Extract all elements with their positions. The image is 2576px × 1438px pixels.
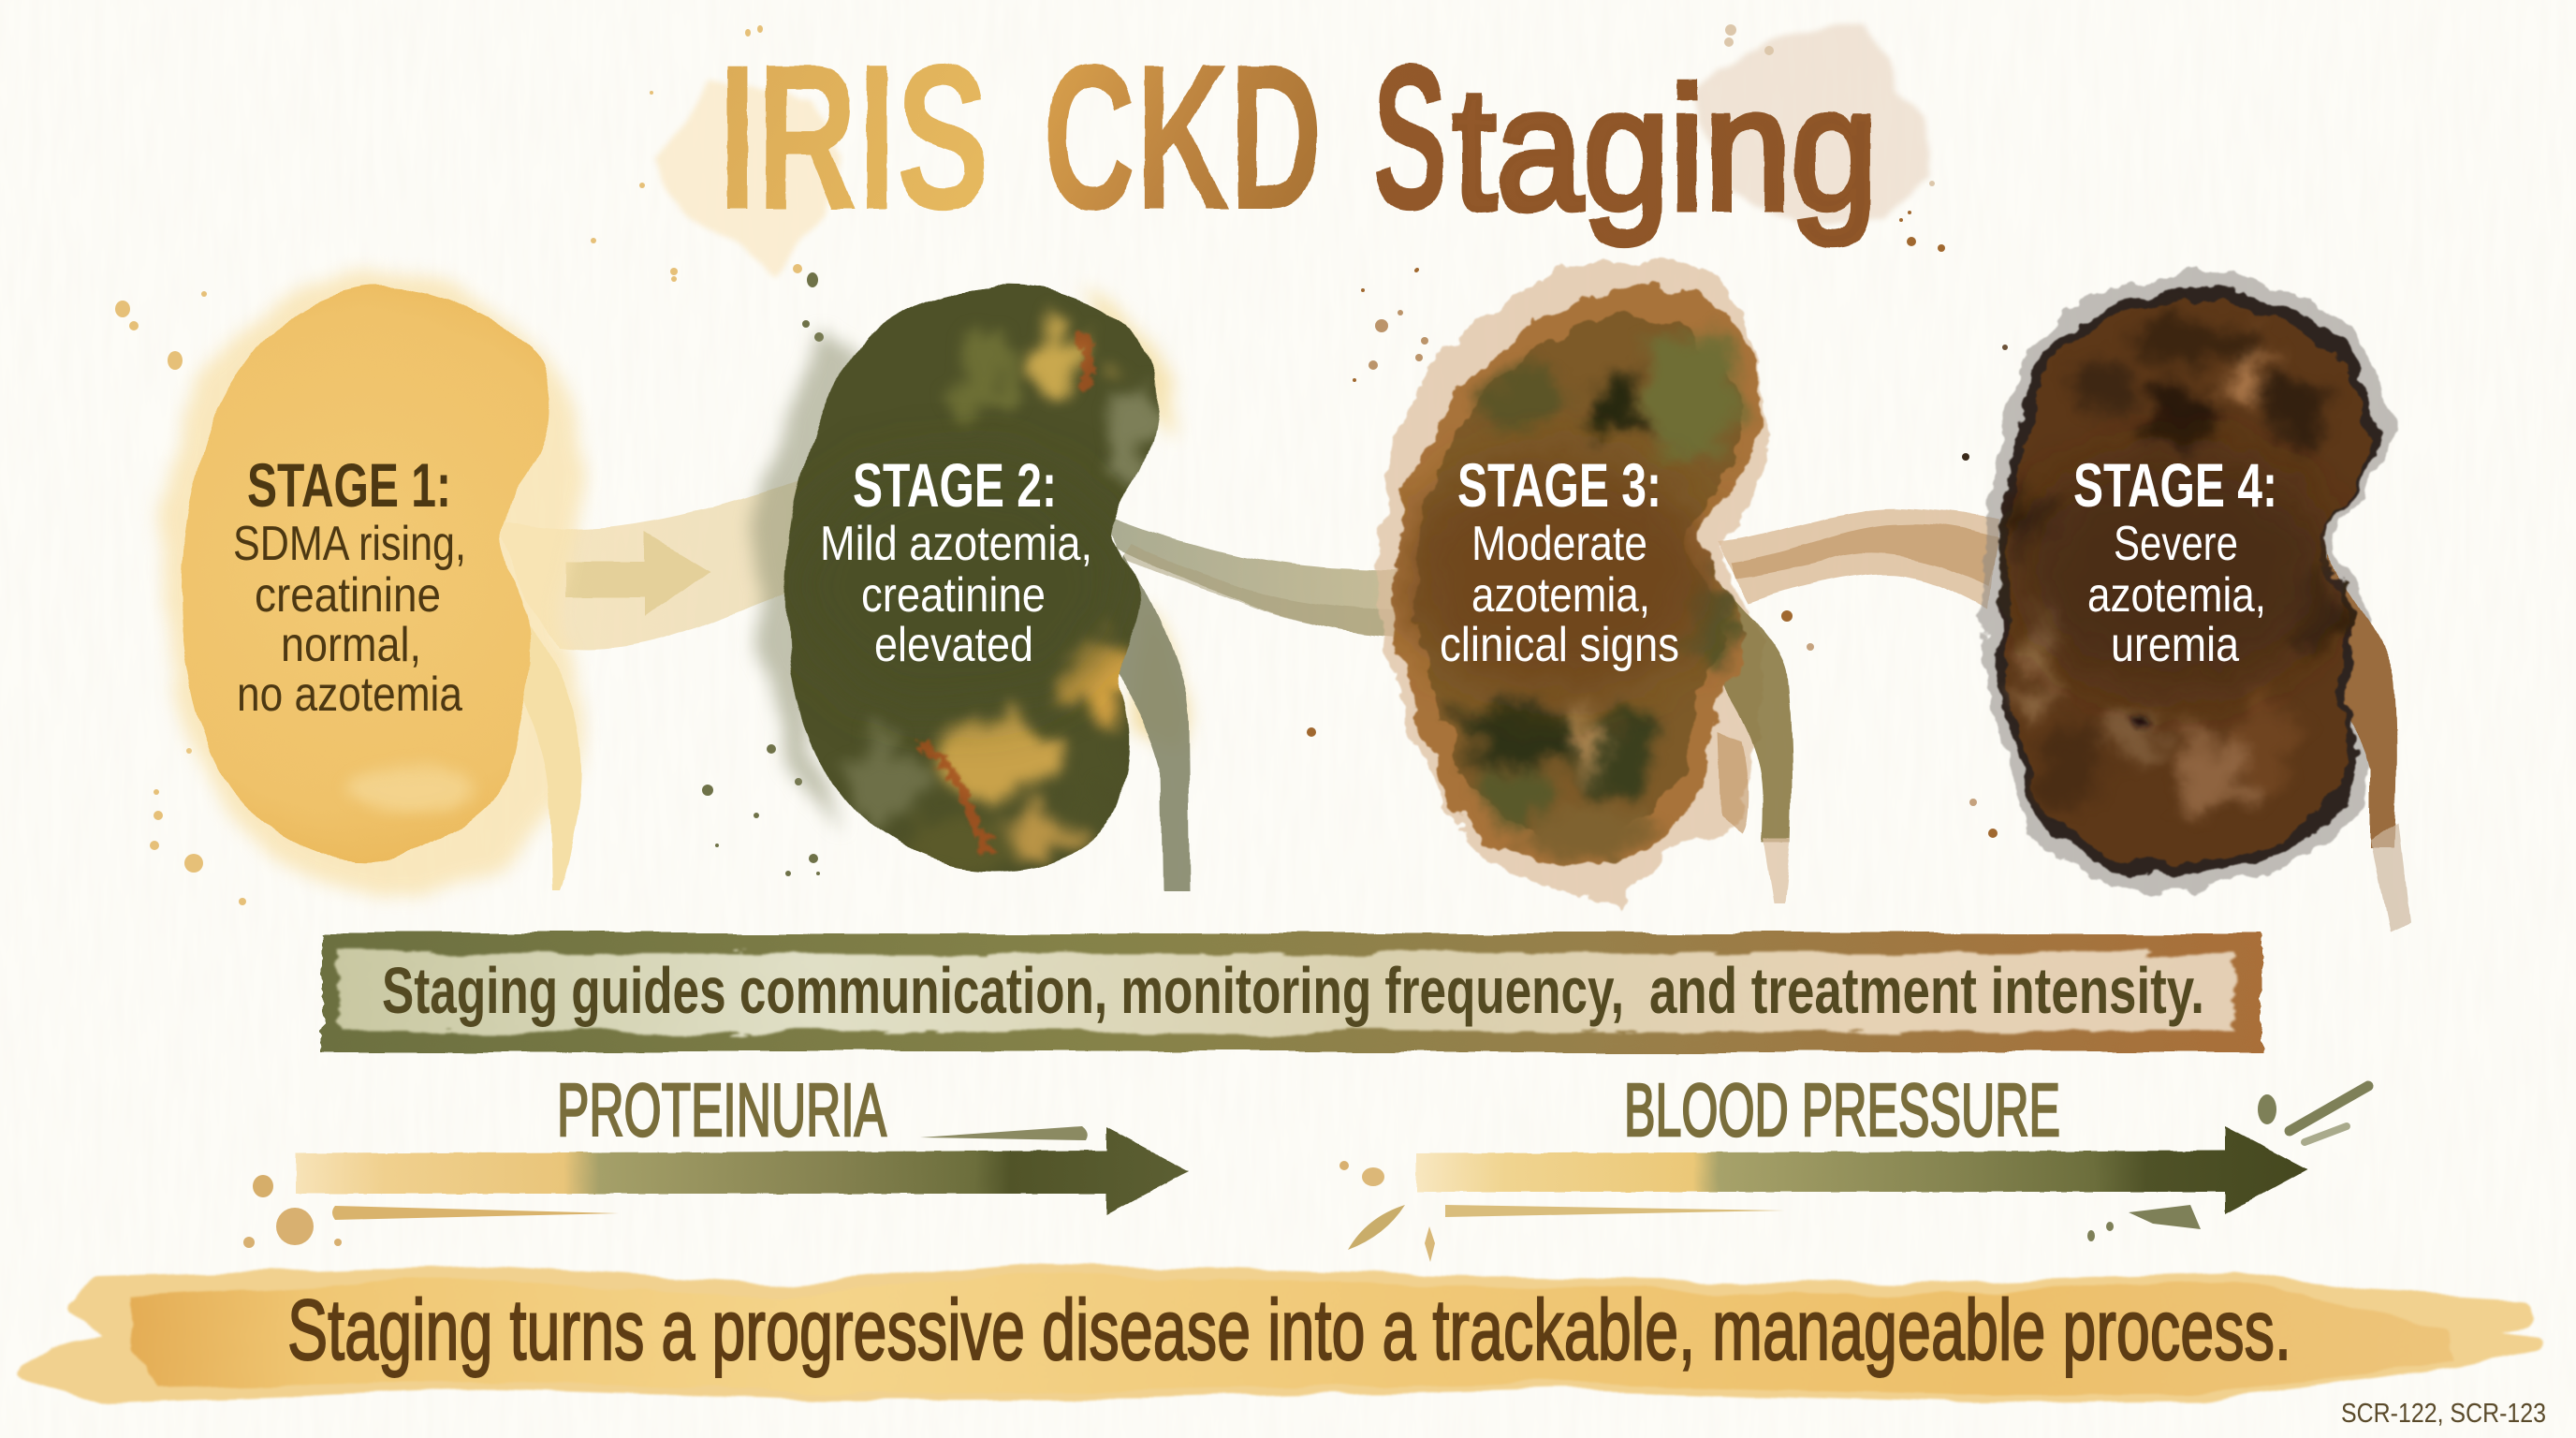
ureter	[501, 599, 580, 889]
accent strokes and drops	[1339, 1086, 2368, 1262]
band frame	[322, 933, 2261, 1052]
band text: Staging guides communication, monitoring frequency,	[382, 954, 1624, 1027]
icon: watercolor arrow	[566, 532, 710, 618]
ureter	[1114, 553, 1191, 889]
stage 1 text: normal,	[281, 618, 421, 672]
stage 3 text: clinical signs	[1440, 618, 1679, 672]
stage 4 text: STAGE 4:	[2073, 450, 2277, 520]
stage 2 text	[820, 450, 1092, 672]
kidney body	[1392, 286, 1761, 865]
panel: stage 4 kidney	[1983, 272, 2409, 932]
wash halo	[1983, 272, 2392, 892]
stage 1 text: SDMA rising,	[233, 517, 466, 571]
stage 3 text: Moderate	[1471, 517, 1647, 571]
stage 3 text: azotemia,	[1471, 568, 1650, 623]
title: taging	[1453, 52, 1878, 246]
connector: stage 1 to stage 2 with arrow	[494, 473, 824, 650]
title: CKD	[1043, 22, 1323, 254]
stage 2 text: Mild azotemia,	[820, 517, 1092, 571]
proteinuria label: PROTEINURIA	[557, 1068, 886, 1152]
panel: stage 3 kidney	[1378, 260, 1792, 908]
source note: SCR-122, SCR-123	[2341, 1399, 2546, 1429]
banner wash	[28, 1272, 2535, 1395]
ureter	[1718, 580, 1792, 903]
stage 3 text: STAGE 3:	[1457, 450, 1661, 520]
connector: stage 3 to stage 4	[1718, 508, 1998, 609]
kidney body	[1996, 288, 2377, 876]
title: S	[1372, 22, 1448, 254]
title: IRIS	[718, 22, 989, 254]
stage 4 text: uremia	[2111, 618, 2239, 672]
stage 3 text	[1440, 450, 1679, 672]
stage 4 text: Severe	[2114, 517, 2238, 571]
kidney body	[181, 286, 550, 861]
stage 4 text: azotemia,	[2087, 568, 2266, 623]
stage 2 text: elevated	[874, 618, 1033, 672]
stage 2 text: STAGE 2:	[853, 450, 1057, 520]
stage 1 text: STAGE 1:	[247, 450, 451, 520]
stage 2 text: creatinine	[861, 568, 1046, 623]
title	[718, 22, 1878, 254]
accent strokes and drops	[243, 1126, 1088, 1248]
stage 1 text	[233, 450, 466, 722]
proteinuria arrow	[296, 1127, 1189, 1215]
panel: takeaway banner	[28, 1272, 2535, 1395]
blood pressure label: BLOOD PRESSURE	[1624, 1068, 2060, 1152]
wash halo	[754, 290, 1184, 833]
blood pressure arrow	[1416, 1126, 2307, 1214]
panel: stage 2 kidney	[754, 286, 1191, 889]
splatter dots	[115, 24, 2008, 905]
wash halo	[162, 271, 584, 890]
ureter	[2327, 553, 2409, 932]
panel: stage 1 kidney	[162, 271, 584, 890]
connector: stage 2 to stage 3	[1101, 513, 1404, 637]
band text: and treatment intensity.	[1649, 954, 2204, 1027]
stage 1 text: creatinine	[255, 568, 441, 623]
stage 4 text	[2073, 450, 2277, 672]
panel: staging guides banner	[322, 933, 2261, 1052]
kidney body	[786, 286, 1156, 871]
panel: proteinuria trend	[243, 1068, 1189, 1248]
stage 1 text: no azotemia	[237, 668, 462, 722]
wash halo	[1378, 260, 1769, 908]
title wash blobs	[651, 25, 1927, 271]
panel: blood pressure trend	[1339, 1068, 2368, 1262]
